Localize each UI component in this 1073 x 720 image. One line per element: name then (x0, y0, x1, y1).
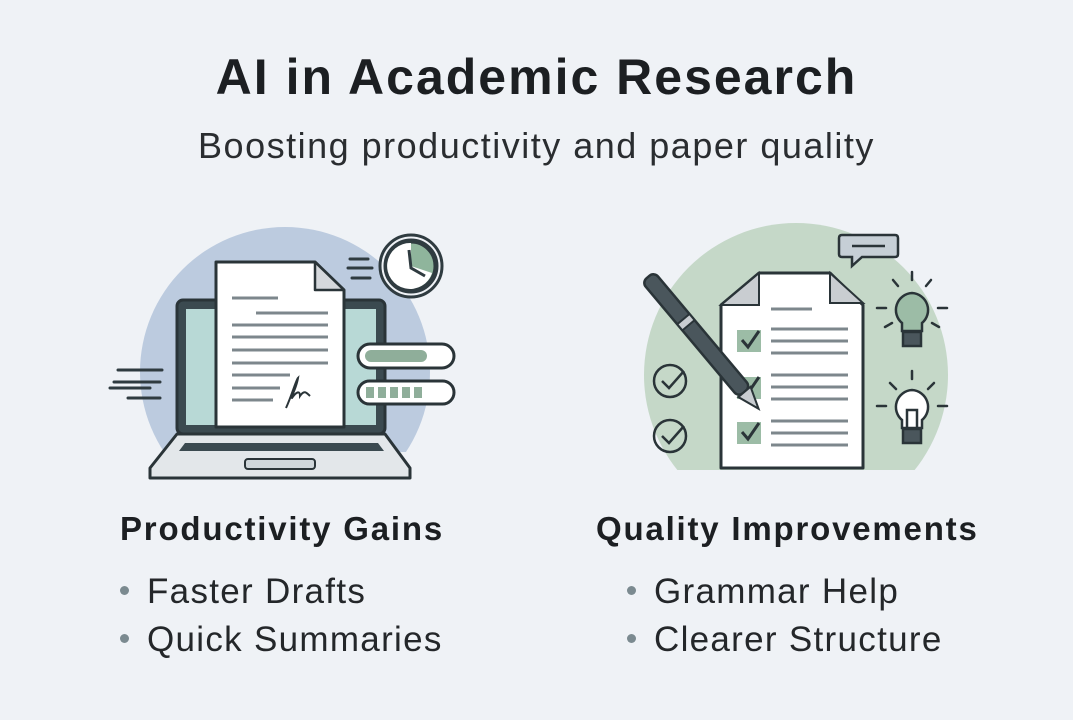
title: AI in Academic Research (216, 49, 857, 105)
bullet list: productivity: Quick Summaries (147, 620, 443, 659)
bullet list: quality: Clearer Structure (654, 620, 943, 659)
illustration: quality document (643, 223, 948, 470)
heading: productivity gains: Productivity Gains (120, 510, 444, 547)
bullet list: quality: Grammar Help (654, 572, 899, 611)
bullet list: productivity: Faster Drafts (147, 572, 366, 611)
bullet list: productivity (120, 572, 443, 659)
illustration: productivity laptop (108, 227, 456, 480)
heading: quality improvements: Quality Improvements (596, 510, 979, 547)
subtitle: Boosting productivity and paper quality (198, 125, 875, 166)
bullet list: quality (627, 572, 943, 659)
